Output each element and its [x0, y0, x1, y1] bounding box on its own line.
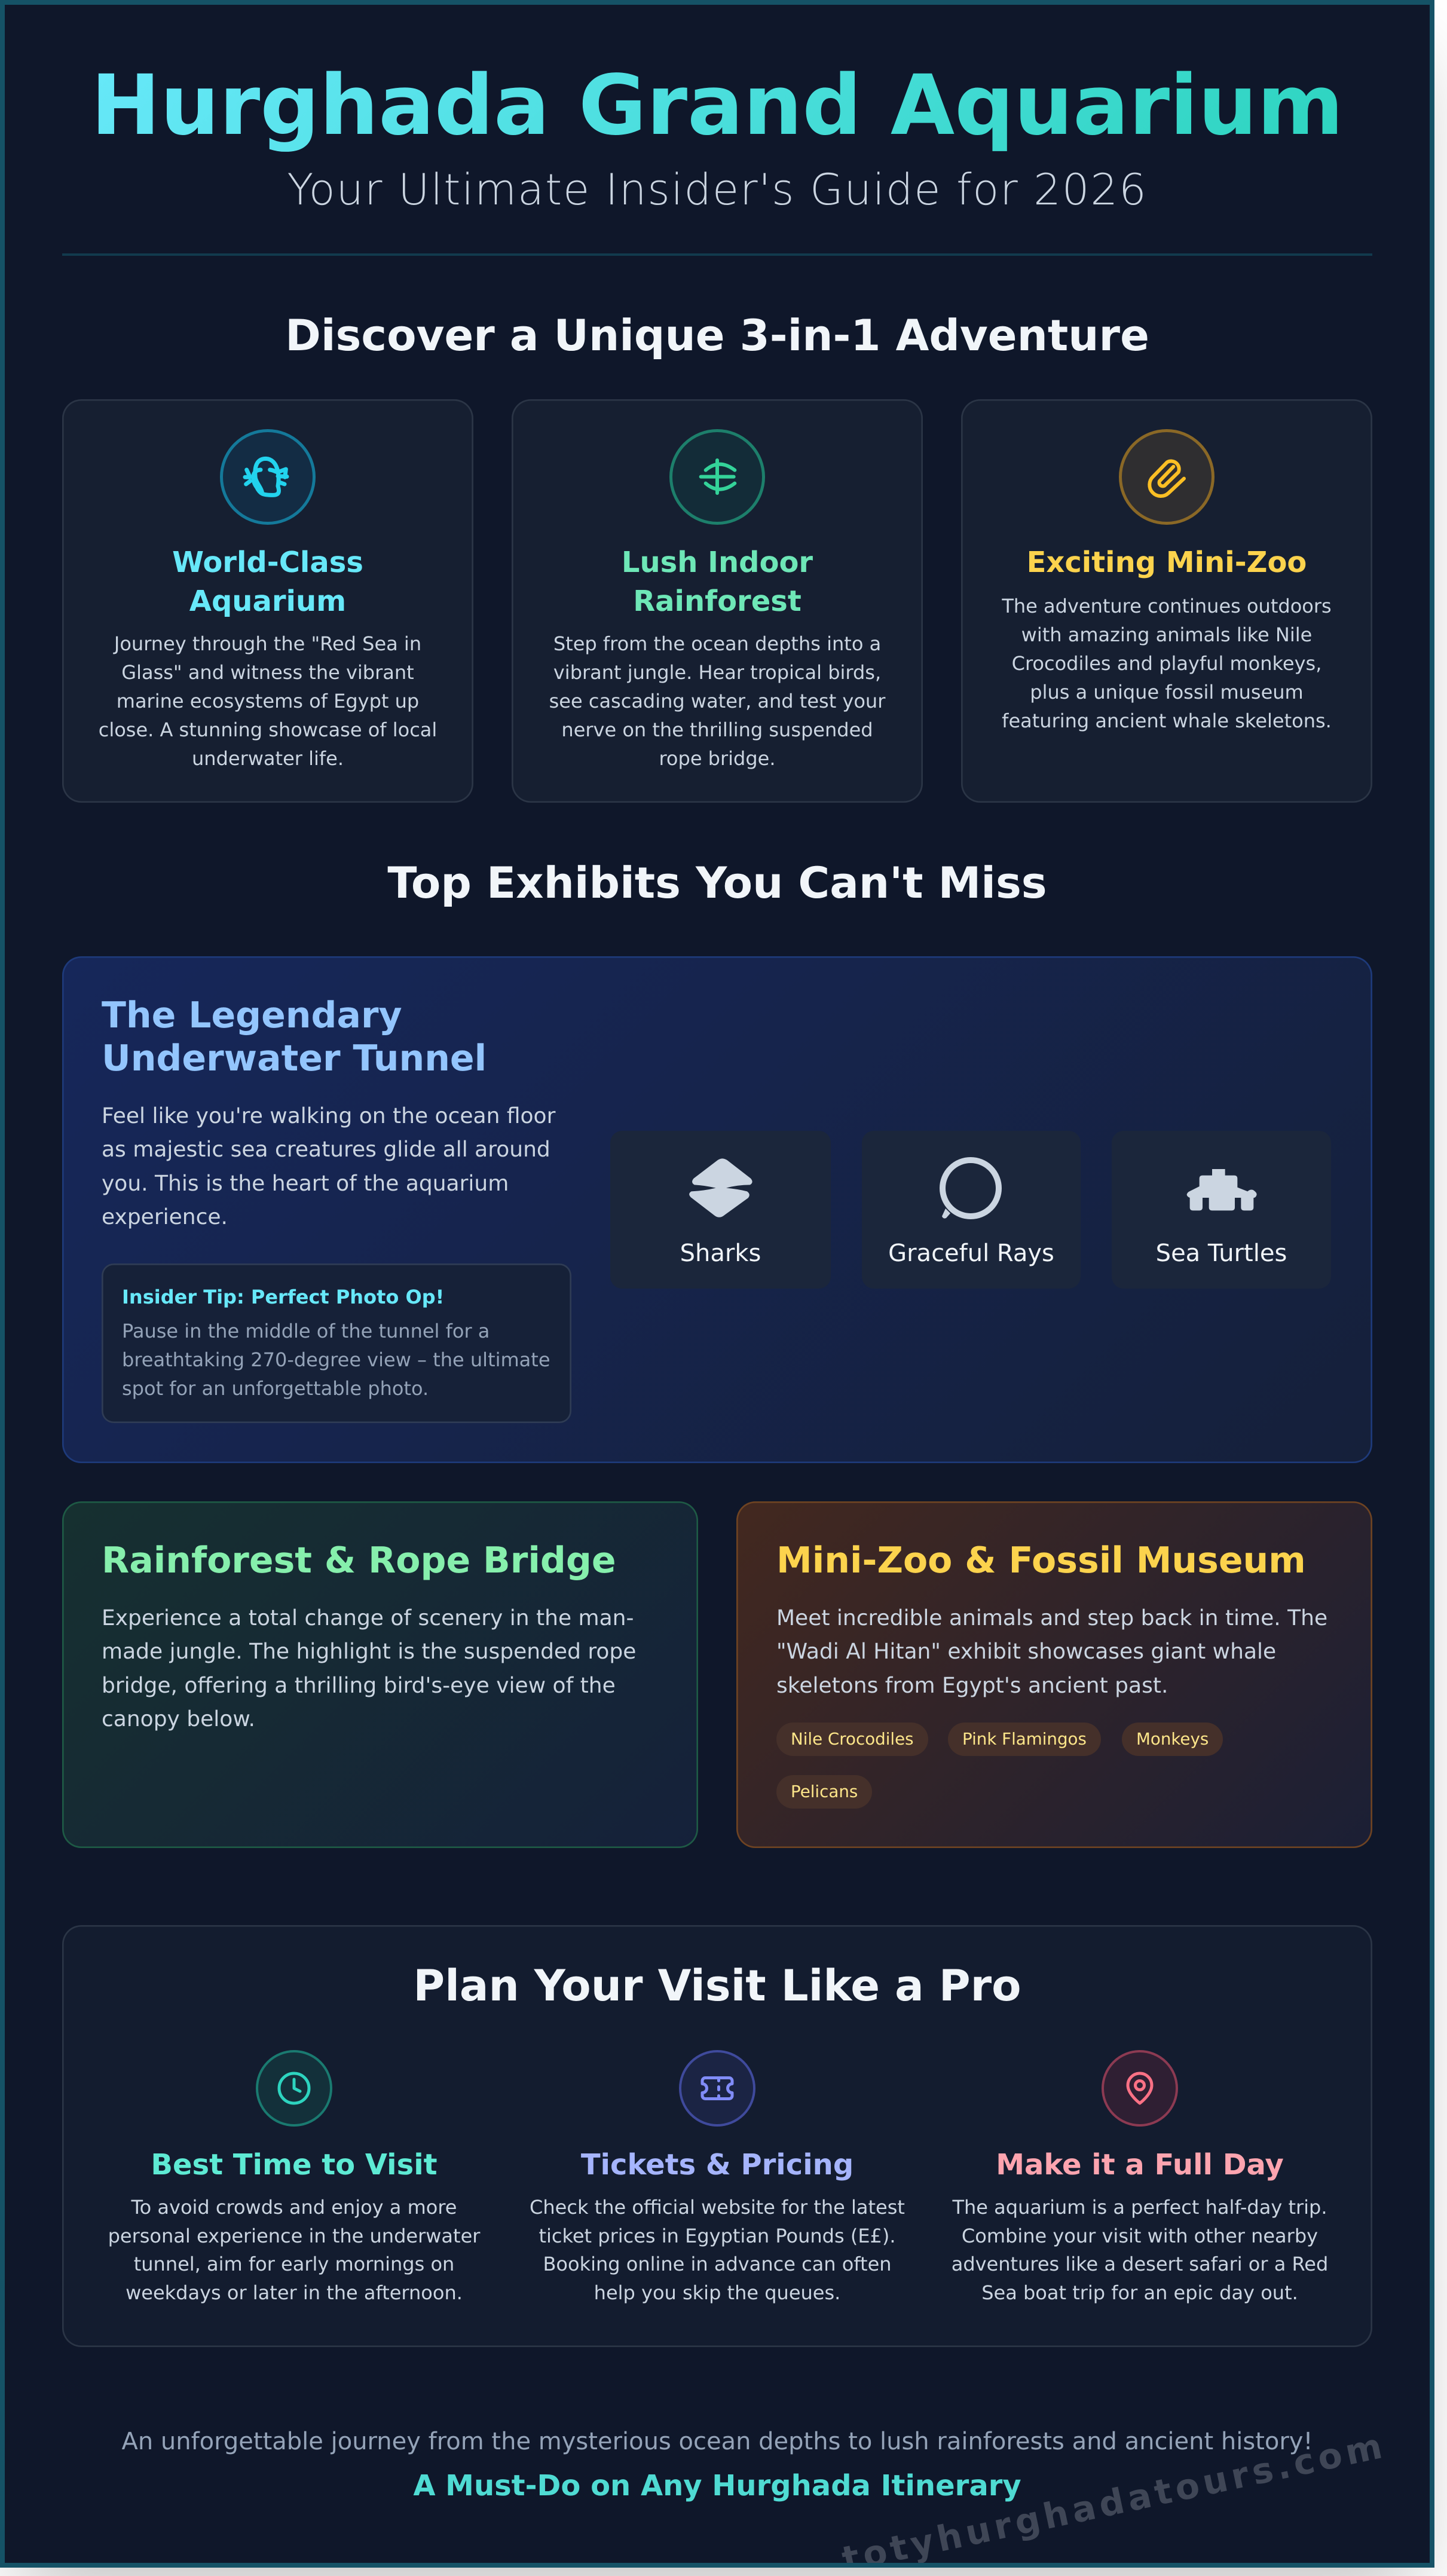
heading: discover: Discover a Unique 3-in-1 Adventure	[285, 310, 1149, 360]
label: Sea Turtles	[1156, 1240, 1287, 1267]
footer tagline: An unforgettable journey from the mysterious ocean depths to lush rainforests and ancient history!	[121, 2428, 1313, 2455]
tag: nile crocodiles	[776, 1723, 928, 1756]
column title: Tickets & Pricing	[581, 2148, 853, 2182]
icon: turtle	[1187, 1169, 1257, 1211]
panel text: "Wadi Al Hitan" exhibit showcases giant whale	[776, 1639, 1276, 1664]
card title	[622, 546, 813, 618]
column text: To avoid crowds and enjoy a more	[131, 2196, 457, 2219]
tag: pelicans: Pelicans	[791, 1782, 858, 1801]
column text: tunnel, aim for early mornings on	[134, 2253, 454, 2275]
icon: clock	[256, 2050, 332, 2127]
column text: adventures like a desert safari or a Red	[952, 2253, 1328, 2275]
panel text: Meet incredible animals and step back in time. The	[776, 1606, 1327, 1630]
panel title: Underwater Tunnel	[102, 1038, 487, 1079]
column text: Sea boat trip for an epic day out.	[981, 2281, 1298, 2304]
column text: personal experience in the underwater	[108, 2225, 480, 2247]
tag: pelicans	[776, 1775, 872, 1809]
card text: featuring ancient whale skeletons.	[1002, 709, 1332, 732]
card title: Lush Indoor	[622, 546, 813, 579]
column text: Check the official website for the latest	[530, 2196, 905, 2219]
card text: Crocodiles and playful monkeys,	[1012, 652, 1321, 675]
icon: shark	[689, 1158, 752, 1217]
tip text: spot for an unforgettable photo.	[122, 1377, 429, 1400]
card title: World-Class	[172, 546, 363, 579]
card title: Exciting Mini-Zoo	[1027, 546, 1307, 579]
panel title: The Legendary	[102, 995, 402, 1036]
panel title: Rainforest & Rope Bridge	[102, 1540, 616, 1581]
column text: ticket prices in Egyptian Pounds (E£).	[539, 2225, 896, 2247]
panel text: Experience a total change of scenery in the man-	[102, 1606, 634, 1630]
card text: nerve on the thrilling suspended	[561, 718, 873, 741]
exhibit: sharks	[610, 1131, 831, 1289]
panel text: you. This is the heart of the aquarium	[102, 1171, 509, 1196]
card title: Rainforest	[633, 585, 801, 618]
footer call to action: A Must-Do on Any Hurghada Itinerary	[413, 2469, 1021, 2502]
column title: Best Time to Visit	[151, 2148, 438, 2182]
icon: map pin	[1102, 2050, 1178, 2127]
icon: ray	[940, 1157, 1002, 1219]
tag: monkeys: Monkeys	[1136, 1729, 1209, 1749]
panel text: as majestic sea creatures glide all around	[102, 1137, 550, 1162]
panel: underwater tunnel	[62, 956, 1372, 1463]
panel: lush indoor rainforest	[512, 399, 923, 803]
card text: Journey through the "Red Sea in	[114, 632, 421, 655]
panel text: skeletons from Egypt's ancient past.	[776, 1674, 1168, 1698]
card text	[1002, 595, 1332, 732]
card text: Glass" and witness the vibrant	[121, 661, 414, 684]
card text: marine ecosystems of Egypt up	[117, 690, 419, 712]
column text: Booking online in advance can often	[543, 2253, 892, 2275]
label: Graceful Rays	[888, 1240, 1054, 1267]
tag: pink flamingos: Pink Flamingos	[962, 1729, 1087, 1749]
exhibit: graceful rays	[862, 1131, 1081, 1289]
icon: fish	[220, 429, 316, 525]
tag: monkeys	[1122, 1723, 1223, 1756]
label: Sharks	[680, 1240, 761, 1267]
heading: top exhibits: Top Exhibits You Can't Miss	[387, 858, 1047, 908]
column: tickets and pricing	[520, 2045, 914, 2332]
panel: mini-zoo and fossil museum	[736, 1501, 1372, 1848]
panel text: Feel like you're walking on the ocean floor	[102, 1104, 555, 1128]
column text	[943, 2193, 1337, 2307]
tip title: Insider Tip: Perfect Photo Op!	[122, 1286, 444, 1308]
icon: paperclip	[1119, 429, 1214, 525]
column text: weekdays or later in the afternoon.	[126, 2281, 463, 2304]
card text: rope bridge.	[659, 747, 776, 770]
card title: Aquarium	[189, 585, 346, 618]
icon: ticket	[679, 2050, 755, 2127]
panel text	[102, 1104, 556, 1229]
callout: insider tip	[102, 1263, 571, 1423]
title: Hurghada Grand Aquarium	[91, 57, 1344, 154]
card text: vibrant jungle. Hear tropical birds,	[553, 661, 881, 684]
panel title: Mini-Zoo & Fossil Museum	[776, 1540, 1306, 1581]
panel text	[776, 1606, 1327, 1698]
tip text: Pause in the middle of the tunnel for a	[122, 1320, 490, 1342]
card text	[99, 632, 437, 770]
column text: help you skip the queues.	[594, 2281, 840, 2304]
card text: see cascading water, and test your	[549, 690, 885, 712]
column text	[520, 2193, 914, 2307]
column: make it a full day	[943, 2045, 1337, 2332]
panel: world-class aquarium	[62, 399, 473, 803]
panel text: made jungle. The highlight is the suspended rope	[102, 1639, 636, 1664]
panel text: bridge, offering a thrilling bird's-eye view of the	[102, 1674, 616, 1698]
card text: close. A stunning showcase of local	[99, 718, 437, 741]
panel title	[102, 995, 487, 1079]
column text: Combine your visit with other nearby	[962, 2225, 1318, 2247]
tip text	[122, 1320, 550, 1400]
card text: The adventure continues outdoors	[1002, 595, 1332, 617]
panel text	[102, 1606, 636, 1731]
column title: Make it a Full Day	[996, 2148, 1284, 2182]
icon: leaf globe	[669, 429, 765, 525]
panel: rainforest and rope bridge	[62, 1501, 698, 1848]
card text: with amazing animals like Nile	[1021, 623, 1312, 646]
panel: plan your visit	[62, 1925, 1372, 2347]
card title	[172, 546, 363, 618]
column text	[108, 2196, 481, 2304]
card text: Step from the ocean depths into a	[553, 632, 881, 655]
card text: underwater life.	[192, 747, 344, 770]
column text: The aquarium is a perfect half-day trip.	[952, 2196, 1327, 2219]
tag: pink flamingos	[948, 1723, 1101, 1756]
panel text: canopy below.	[102, 1707, 255, 1731]
card text	[549, 632, 886, 770]
exhibit: sea turtles	[1112, 1131, 1331, 1289]
panel: exciting mini-zoo	[961, 399, 1372, 803]
tag: nile crocodiles: Nile Crocodiles	[791, 1729, 914, 1749]
column: best time to visit	[108, 2050, 481, 2304]
card text: plus a unique fossil museum	[1030, 681, 1304, 703]
subtitle: Your Ultimate Insider's Guide for 2026	[287, 164, 1148, 215]
panel heading: Plan Your Visit Like a Pro	[413, 1960, 1021, 2011]
tip text: breathtaking 270-degree view – the ultimate	[122, 1348, 550, 1371]
panel text: experience.	[102, 1205, 228, 1229]
